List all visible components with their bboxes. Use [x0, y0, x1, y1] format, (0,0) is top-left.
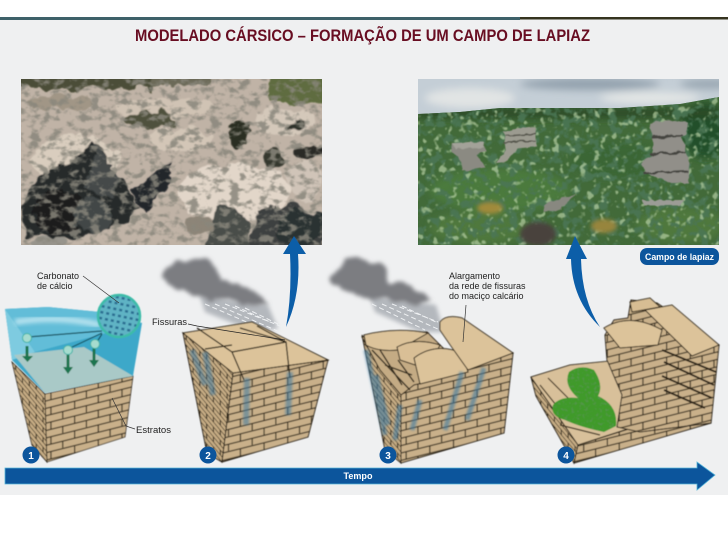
cloud 1 with rain [165, 257, 285, 332]
label: Alargamento: Alargamento [449, 271, 500, 281]
photo: lapiaz field with rock pillars [418, 78, 728, 246]
number badge 2 [200, 446, 216, 464]
number badge 3 [380, 446, 396, 464]
block 4: karst field with vegetation [531, 298, 719, 463]
number badge 1: 1 [28, 451, 34, 462]
label: Fissuras [152, 317, 285, 340]
label: Carbonato de cálcio [37, 271, 119, 303]
water seeping blue [366, 350, 484, 440]
water body [5, 307, 142, 393]
label: Campo de lapiaz [640, 248, 719, 265]
time arrow: Tempo [344, 471, 373, 481]
label: Estratos [112, 398, 172, 435]
fissure lines on top [197, 326, 290, 380]
label: Fissuras: Fissuras [152, 317, 188, 327]
number badge 4: 4 [563, 451, 569, 462]
precipitate arrows [22, 345, 99, 374]
number badge 2: 2 [205, 451, 211, 462]
title: MODELADO CÁRSICO – FORMAÇÃO DE UM CAMPO DE LAPIAZ [135, 25, 590, 45]
label: Campo de lapiaz: Campo de lapiaz [645, 252, 714, 262]
block 3: enlarged fissures [362, 317, 513, 463]
label: Estratos: Estratos [136, 425, 172, 435]
label: Carbonato de cálcio: Carbonato [37, 271, 79, 281]
time arrow [5, 462, 715, 490]
number badge 3: 3 [385, 451, 391, 462]
arrow: photo 1 link [283, 236, 306, 327]
number badge 1 [22, 446, 40, 464]
brick strata, block 1 [12, 362, 133, 462]
block 2: fissures [183, 322, 328, 462]
label: Alargamento [449, 271, 526, 342]
top border strip [0, 17, 728, 20]
label: Carbonato de cálcio: de cálcio [37, 281, 73, 291]
arrow: photo 2 link [566, 236, 600, 327]
cloud 2 with rain [332, 257, 444, 332]
moss patch [552, 366, 617, 432]
rock pillars [451, 120, 690, 211]
number badge 4 [558, 446, 574, 464]
magnified carbonate circles [22, 295, 140, 354]
water seeping blue [192, 350, 290, 425]
label: Alargamento: da rede de fissuras [449, 281, 526, 291]
block 1: water over strata [5, 295, 142, 462]
photo: limestone rock outcrop [21, 79, 322, 245]
label: Alargamento: do maciço calcário [449, 291, 524, 301]
